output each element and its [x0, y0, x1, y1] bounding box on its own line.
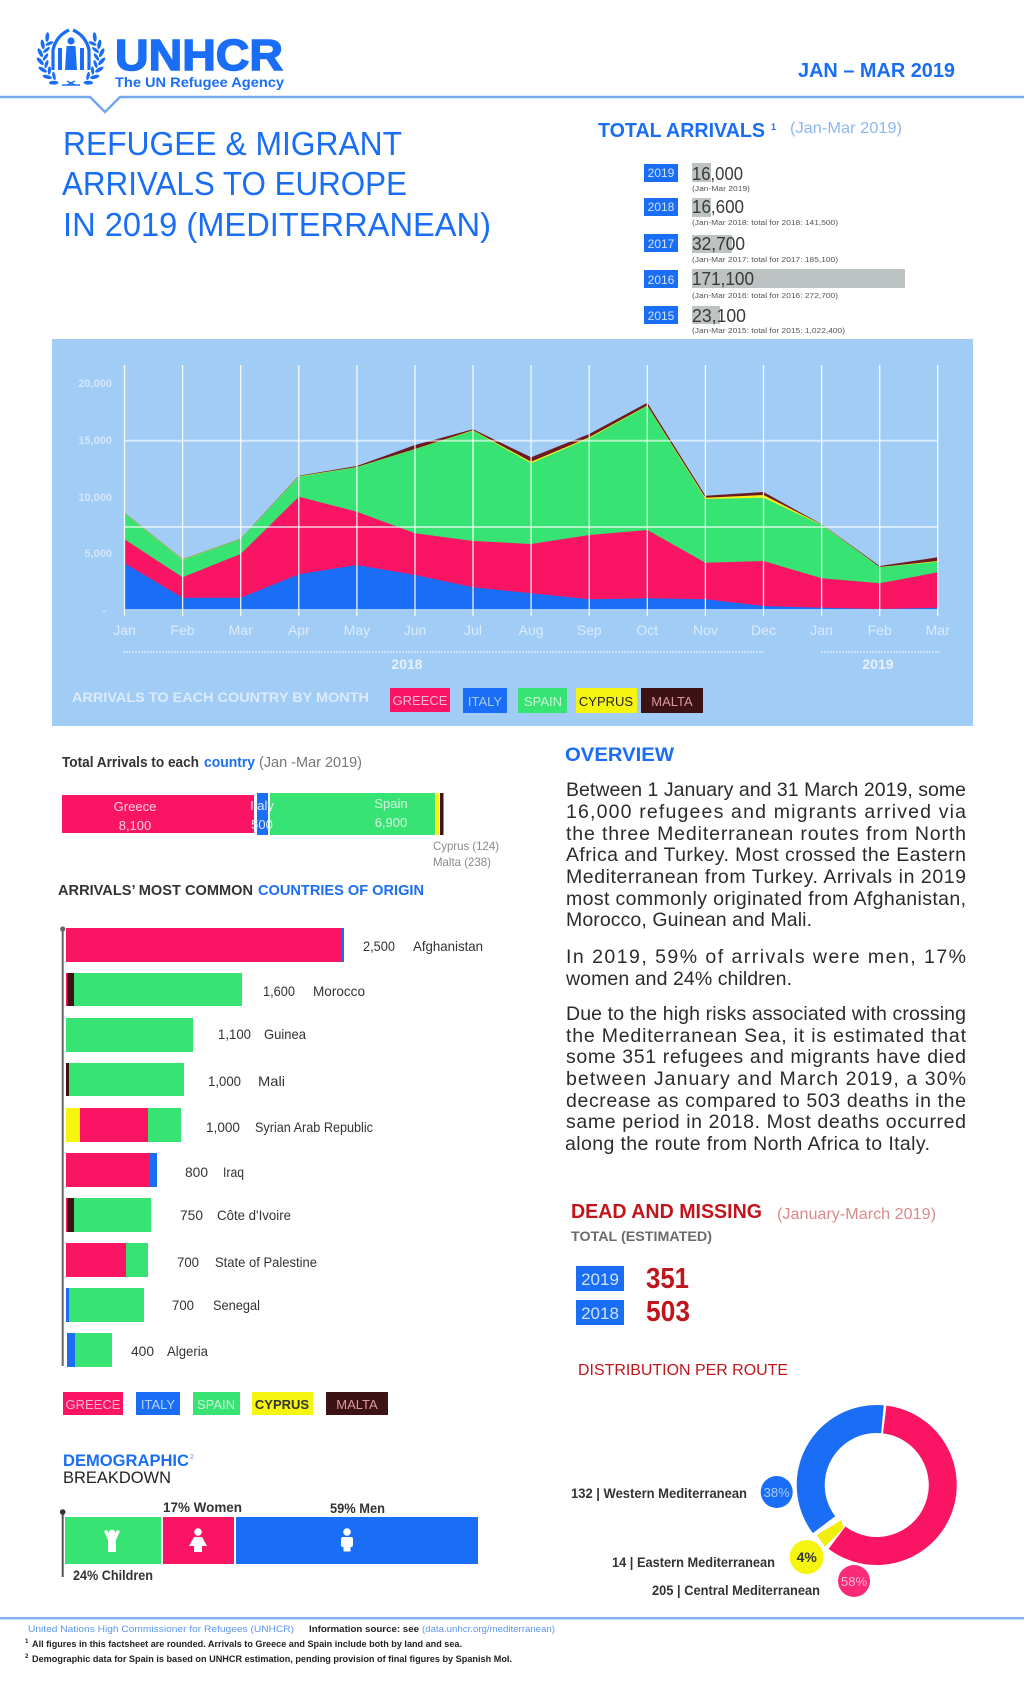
row 2016: [644, 269, 905, 300]
bar: Mali: [66, 1063, 285, 1096]
panel: countries of origin: [58, 882, 483, 1415]
y axis labels: 10,000: [78, 492, 112, 504]
x axis months: Aug: [519, 622, 544, 638]
chart legend: ITALY: [468, 694, 502, 709]
row 2017: 32,700: [692, 234, 745, 254]
title: ARRIVALS TO EUROPE: [62, 165, 407, 202]
source line: [28, 1624, 555, 1634]
title: REFUGEE & MIGRANT: [63, 125, 402, 162]
bar: State of Palestine: State of Palestine: [215, 1254, 317, 1270]
bar: Senegal: 700: [172, 1297, 194, 1313]
legend: GREECE: [66, 1397, 121, 1412]
paragraph 1: Morocco, Guinean and Mali.: [566, 909, 812, 931]
segment: men: [236, 1517, 478, 1564]
paragraph 3: along the route from North Africa to Italy.: [565, 1133, 930, 1155]
icon: man: [341, 1528, 353, 1552]
heading: TOTAL ARRIVALS: [598, 120, 765, 142]
footnote 2: Demographic data for Spain is based on UNHCR estimation, pending provision of final figures by Spanish MoI.: [32, 1654, 512, 1664]
panel: arrivals by month chart: [52, 339, 973, 726]
donut chart: [797, 1405, 957, 1565]
panel: total arrivals: [598, 120, 905, 335]
bar: Mali: Mali: [258, 1073, 285, 1089]
heading: ARRIVALS’ MOST COMMON: [58, 882, 253, 899]
footnote 1: 1: [25, 1639, 29, 1645]
source line: Information source: see: [309, 1624, 419, 1634]
stacked bar: [62, 793, 444, 835]
row 2019: (Jan-Mar 2019): [692, 186, 750, 193]
paragraph 2: [565, 946, 966, 990]
x axis months: Jul: [464, 622, 482, 638]
row 2015: 2015: [648, 309, 675, 323]
paragraph 3: the Mediterranean Sea, it is estimated that: [566, 1025, 967, 1047]
paragraph 1: most commonly originated from Afghanistan,: [566, 888, 966, 910]
paragraph 3: [565, 1003, 967, 1155]
bar: Morocco: 1,600: [263, 983, 295, 999]
small country labels: Malta (238): [433, 855, 491, 869]
bar: Guinea: Guinea: [264, 1026, 306, 1042]
panel: dead and missing: [571, 1201, 957, 1598]
stacked bar: 8,100: [119, 818, 151, 833]
bar: Syrian Arab Republic: Syrian Arab Republic: [255, 1119, 373, 1135]
small country labels: [433, 839, 499, 869]
row 2019: [644, 163, 750, 193]
legend: CYPRUS: [255, 1397, 309, 1412]
y axis labels: 20,000: [78, 378, 112, 390]
paragraph 1: [566, 779, 966, 931]
paragraph 3: decrease as compared to 503 deaths in the: [566, 1090, 966, 1112]
labels: [73, 1499, 385, 1583]
footnote 1: All figures in this factsheet are rounded. Arrivals to Greece and Spain include both by land and sea.: [32, 1639, 462, 1649]
bar: Côte d'Ivoire: [66, 1198, 291, 1232]
paragraph 3: between January and March 2019, a 30%: [566, 1068, 966, 1090]
chart caption: ARRIVALS TO EACH COUNTRY BY MONTH: [72, 689, 369, 705]
row 2017: 2017: [648, 237, 675, 251]
heading: [62, 755, 362, 771]
row 2015: (Jan-Mar 2015: total for 2015: 1,022,400): [692, 328, 845, 335]
chart legend: CYPRUS: [579, 694, 633, 709]
row 2017: (Jan-Mar 2017: total for 2017: 185,100): [692, 257, 838, 264]
route: central: 205 | Central Mediterranean: [652, 1583, 820, 1598]
bar: Syrian Arab Republic: [66, 1108, 373, 1142]
paragraph 1: 16,000 refugees and migrants arrived via: [566, 801, 966, 823]
bar: Morocco: Morocco: [313, 983, 365, 999]
x axis months: Oct: [636, 622, 658, 638]
labels: 17% Women: [163, 1499, 242, 1515]
bar: Algeria: 400: [131, 1343, 154, 1359]
paragraph 1: Between 1 January and 31 March 2019, some: [566, 779, 966, 801]
labels: 24% Children: [73, 1567, 153, 1583]
heading: 2: [190, 1454, 194, 1461]
bar: Afghanistan: Afghanistan: [413, 938, 483, 954]
legend: ITALY: [141, 1397, 175, 1412]
wordmark: UNHCR: [115, 31, 283, 80]
route: eastern: [612, 1540, 824, 1574]
title: IN 2019 (MEDITERRANEAN): [63, 206, 491, 243]
date label: JAN – MAR 2019: [798, 60, 955, 82]
x axis months: Feb: [868, 622, 892, 638]
y axis labels: [78, 378, 112, 617]
row 2018: (Jan-Mar 2018: total for 2018: 141,500): [692, 220, 838, 227]
heading: Total Arrivals to each: [62, 755, 199, 771]
panel: demographic breakdown: [60, 1451, 478, 1583]
row 2018: 16,600: [692, 197, 744, 217]
bar: Guinea: 1,100: [218, 1026, 251, 1042]
route: central: [652, 1565, 870, 1598]
heading: TOTAL (ESTIMATED): [571, 1228, 712, 1244]
UNHCR logo: [36, 30, 284, 90]
x axis months: Feb: [171, 622, 195, 638]
bar: Côte d'Ivoire: 750: [180, 1207, 203, 1223]
route: central: 58%: [841, 1574, 867, 1589]
route: western: 38%: [764, 1485, 790, 1500]
row 2019: 2019: [648, 166, 675, 180]
heading: (Jan-Mar 2019): [790, 120, 902, 137]
chart legend: SPAIN: [524, 694, 562, 709]
icon: child: [104, 1530, 120, 1552]
y axis labels: -: [102, 605, 106, 617]
route: western: 132 | Western Mediterranean: [571, 1486, 747, 1501]
row 2016: 2016: [648, 273, 675, 287]
tagline: The UN Refugee Agency: [115, 74, 284, 90]
footer: [0, 1617, 1024, 1664]
small country labels: Cyprus (124): [433, 839, 499, 853]
panel: overview: [565, 745, 967, 1155]
stacked area chart: [124, 365, 938, 616]
bar: Iraq: [66, 1153, 244, 1187]
year brackets: [123, 652, 940, 672]
paragraph 3: some 351 refugees and migrants have died: [566, 1046, 966, 1068]
x axis months: Jan: [113, 622, 136, 638]
panel: total arrivals to each country: [62, 755, 499, 869]
heading: COUNTRIES OF ORIGIN: [258, 882, 424, 899]
bar: Iraq: 800: [185, 1164, 208, 1180]
row 2015: 23,100: [692, 306, 746, 326]
stacked bar: 6,900: [375, 815, 407, 830]
segment: children: [65, 1517, 161, 1564]
year brackets: 2018: [391, 656, 423, 672]
subheading: DISTRIBUTION PER ROUTE: [578, 1362, 788, 1379]
paragraph 1: Mediterranean from Turkey. Arrivals in 2019: [566, 866, 966, 888]
x axis months: Apr: [288, 622, 310, 638]
paragraph 3: same period in 2018. Most deaths occurred: [566, 1111, 966, 1133]
y axis labels: 5,000: [84, 548, 112, 560]
header rule with notch: [0, 97, 1024, 112]
heading: country: [204, 755, 255, 771]
bar: Afghanistan: 2,500: [363, 938, 395, 954]
icon: UNHCR emblem: [36, 30, 106, 85]
x axis months: Nov: [693, 622, 718, 638]
bar: Morocco: [66, 973, 365, 1006]
row 2017: [644, 234, 838, 264]
footnote 2: 2: [25, 1654, 29, 1660]
paragraph 1: the three Mediterranean routes from North: [566, 823, 966, 845]
icon: woman: [189, 1528, 207, 1552]
row 2016: 171,100: [692, 269, 754, 289]
x axis months: May: [344, 622, 370, 638]
heading: [598, 120, 902, 142]
bar: Algeria: [67, 1333, 208, 1367]
paragraph 2: In 2019, 59% of arrivals were men, 17%: [566, 946, 966, 968]
bar: Côte d'Ivoire: Côte d'Ivoire: [217, 1207, 291, 1223]
paragraph 1: Africa and Turkey. Most crossed the Eastern: [566, 844, 966, 866]
heading: [58, 882, 424, 899]
bar: State of Palestine: 700: [177, 1254, 199, 1270]
stacked bar: Greece: [114, 799, 156, 814]
title: [62, 125, 491, 243]
paragraph 3: Due to the high risks associated with crossing: [566, 1003, 966, 1025]
axis: [60, 1509, 66, 1577]
x axis months: [113, 622, 950, 638]
heading: (Jan -Mar 2019): [259, 755, 362, 771]
x axis months: Jan: [810, 622, 833, 638]
stacked bar: Spain: [374, 796, 408, 811]
chart legend: GREECE: [393, 693, 448, 708]
totals: 2018: [581, 1304, 619, 1323]
stacked bar: 500: [251, 817, 273, 832]
row 2015: [644, 306, 845, 335]
route: eastern: 14 | Eastern Mediterranean: [612, 1555, 775, 1570]
legend: MALTA: [336, 1397, 378, 1412]
heading: DEAD AND MISSING: [571, 1201, 762, 1223]
row 2016: (Jan-Mar 2016: total for 2016: 272,700): [692, 293, 838, 300]
segment: women: [163, 1517, 234, 1564]
x axis months: Jun: [404, 622, 426, 638]
legend: [63, 1392, 388, 1415]
bar: Senegal: Senegal: [213, 1297, 260, 1313]
totals: [576, 1263, 690, 1328]
bar: Syrian Arab Republic: 1,000: [206, 1119, 240, 1135]
heading: [63, 1451, 194, 1487]
y axis labels: 15,000: [78, 435, 112, 447]
x axis months: Mar: [229, 622, 253, 638]
stacked bar: Italy: [250, 798, 274, 813]
source line: United Nations High Commissioner for Refugees (UNHCR): [28, 1624, 294, 1634]
route: eastern: 4%: [797, 1549, 817, 1565]
legend: SPAIN: [197, 1397, 235, 1412]
bar: Senegal: [66, 1288, 260, 1322]
heading: DEMOGRAPHIC: [63, 1451, 189, 1470]
x axis months: Mar: [926, 622, 950, 638]
bar: Algeria: Algeria: [167, 1343, 208, 1359]
totals: 2019: [581, 1270, 619, 1289]
heading: [571, 1201, 936, 1244]
paragraph 2: women and 24% children.: [565, 968, 792, 990]
row 2019: 16,000: [692, 164, 743, 184]
heading: 1: [771, 122, 776, 132]
source line: (data.unhcr.org/mediterranean): [422, 1624, 555, 1634]
bar: Guinea: [66, 1018, 306, 1052]
heading: (January-March 2019): [777, 1206, 936, 1223]
bar: Iraq: Iraq: [223, 1164, 244, 1180]
totals: 351: [646, 1263, 689, 1295]
x axis months: Dec: [751, 622, 776, 638]
x axis months: Sep: [577, 622, 602, 638]
labels: 59% Men: [330, 1500, 385, 1516]
chart legend: MALTA: [651, 694, 693, 709]
bar: Afghanistan: [66, 928, 483, 962]
bar: Mali: 1,000: [208, 1073, 241, 1089]
bar: State of Palestine: [66, 1243, 317, 1277]
year brackets: 2019: [862, 656, 894, 672]
heading: OVERVIEW: [565, 745, 674, 766]
chart legend: [390, 688, 703, 713]
row 2018: 2018: [648, 200, 675, 214]
heading: BREAKDOWN: [63, 1468, 171, 1487]
row 2018: [644, 197, 838, 227]
totals: 503: [646, 1296, 690, 1328]
axis: [60, 926, 65, 1366]
route: western: [571, 1476, 793, 1508]
